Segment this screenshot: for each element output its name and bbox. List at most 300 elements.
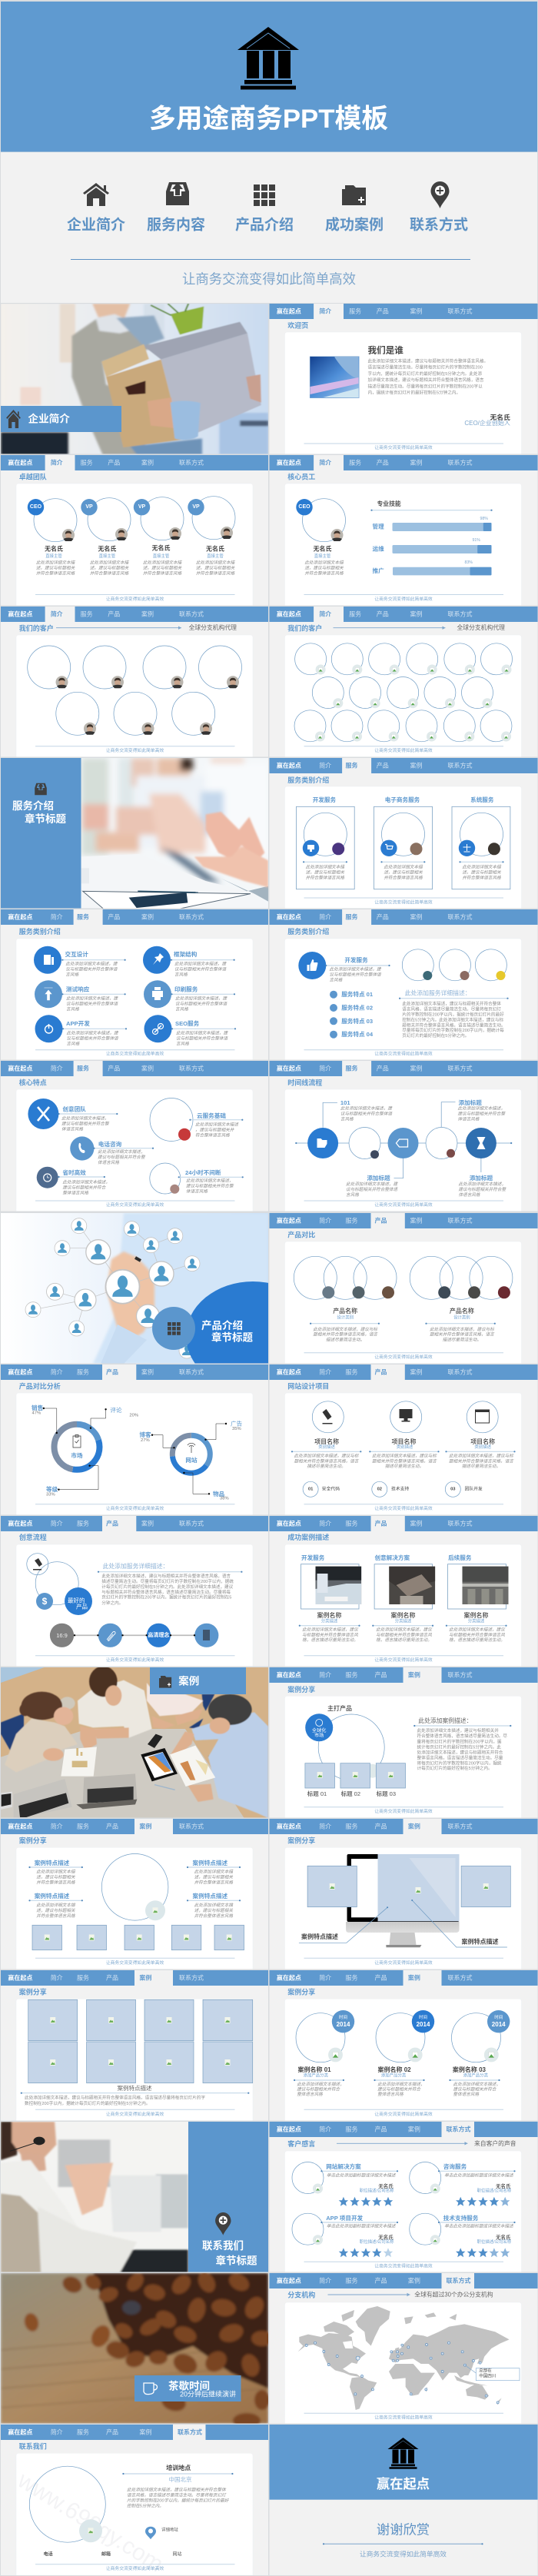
nav bar [269,1364,538,1380]
feature: efficiency [37,1167,110,1195]
page title: 案例分享 [287,1987,315,1996]
team member: CEO: 直接主管 [45,553,62,559]
gallery caption: 此处添加详细文本描述，建议与标题相关并符合整体语言风格，语言描述尽量将每页幻灯片的字 [25,2094,205,2100]
team member: VP 2: VP [138,504,145,510]
page title: 案例分享 [19,1987,47,1996]
photo: living room [389,1567,435,1604]
nav bar: 简介 [51,2428,63,2435]
step: lower title 1: 议与标题相关并符合整体语 [346,1187,399,1192]
feature: 24 hours: 此处添加详细文本描述， [186,1178,234,1184]
case 3: 案例名称 [464,1611,489,1619]
nav bar [1,1516,269,1531]
body text: 字以内，据统计每页幻灯片的最好控制在5分钟之内。此处添 [367,371,482,377]
case 03: 2014 [492,2020,506,2028]
nav bar: 服务 [77,1064,89,1072]
footer: 让商务交流变得如此简单高效 [374,2262,433,2269]
feature: efficiency: 此处添加详细文本描述， [62,1179,110,1185]
process steps [50,1624,218,1647]
feature left top: 述，建议与标题相关 [36,1875,75,1880]
thank you text: 谢谢欣赏 [377,2522,430,2538]
nav bar: 简介 [319,2277,331,2285]
service: testing: 此处添加详细文本描述，建 [66,996,119,1002]
numbered feature list: 技术支持 [391,1485,409,1491]
signature: 无名氏 [490,413,510,421]
team member: CEO: CEO [30,504,42,510]
network connectors [33,1226,192,1328]
nav bar: 案例 [139,1974,151,1982]
feature right top [188,1859,240,1886]
icon: home [6,410,21,428]
nav bar: 产品 [108,610,120,618]
nav bar: 联系方式 [447,1519,472,1527]
feature: 24 hours: 24小时不间断 [185,1168,221,1176]
page title: 产品对比分析 [19,1381,61,1390]
case 02: 时间 [419,2014,427,2020]
nav bar: 服务 [346,1519,358,1527]
nav bar [269,1213,538,1228]
nav bar: 产品 [377,913,389,921]
section panel [188,2122,268,2272]
nav bar: 案例 [410,1064,423,1072]
nav bar: 联系方式 [447,761,472,769]
section labels: 联系方式 [410,215,468,234]
page title: 客户感言 [287,2139,315,2148]
team member: CEO: 无名氏 [314,544,332,552]
photo: shelves [463,1567,509,1604]
product group 2: 此处添加详细文本描述，建议与标 [430,1327,495,1332]
step: lower title 2: 体语言风格 [458,1192,480,1198]
company name: 赢在起点 [377,2476,430,2491]
content card [284,635,521,766]
page title: 案例分享 [19,1836,47,1844]
slide: case section cover [1,1667,268,1817]
detail description: 尽量将每页幻灯片的字数控制在200字以内，据统计每 [402,1027,504,1033]
central image ring [101,1854,168,1920]
testimonial: consulting [410,2162,515,2206]
team member: CEO: 述，建议与标题相关 [36,565,75,570]
footer: 让商务交流变得如此简单高效 [374,1505,433,1511]
world map [298,2306,510,2410]
nav bar: 服务 [77,913,89,921]
nav bar [269,607,538,622]
photo: team around table [1,1666,268,1818]
nav bar: 案例 [408,1974,420,1982]
footer: 让商务交流变得如此简单高效 [106,1959,164,1966]
donut chart: website: 物品 [213,1490,225,1497]
photo: woman carrying box [1,304,268,455]
service: framework: 框架结构 [174,950,198,958]
tea break banner [134,2375,241,2401]
training location: 中国北京 [169,2475,192,2483]
project 3: 此处添加详细文本描述，建议与标 [449,1454,514,1459]
photo: network diagram with hand [1,1213,268,1364]
service card: development: 述，建议与标题相关 [306,869,344,875]
body text: 加详细文本描述，建议与标题相关并符合整体语言风格，语言 [367,377,484,383]
slide: monitor showcase [269,1819,538,1969]
feature: 24 hours [150,1163,243,1195]
nav bar: 产品 [375,1519,387,1527]
service: printing: 印刷服务 [174,986,198,993]
service feature list: 服务特点 02 [341,1004,373,1012]
case 02: 建议与标题相关并符合 [377,2086,421,2092]
nav bar: 服务 [77,1822,89,1830]
step: lower title 1: 言风格 [346,1192,359,1198]
nav bar: 简介 [319,1519,331,1527]
team member: VP 1: 并符合整体语言风格 [90,570,129,576]
team member: CEO: 无名氏 [45,544,63,552]
service: printing [144,980,234,1012]
nav bar: 案例 [139,2428,151,2435]
service: testing [35,980,125,1012]
project 1: 描述尽量简洁生动。 [307,1464,346,1469]
nav bar: 服务 [349,458,361,466]
nav bar: 产品 [375,1822,387,1830]
image grid [28,1999,253,2083]
page title: 服务类别介绍 [287,776,329,784]
nav bar: 案例 [141,1519,154,1527]
section banner [150,1667,246,1694]
numbered feature list: 03 [450,1487,456,1491]
nav bar: 联系方式 [447,1216,472,1224]
image rings [402,949,506,981]
nav bar: 产品 [106,1974,118,1982]
content card [16,1999,253,2129]
feature: phone consulting: 电话咨询 [98,1140,122,1148]
nav bar: 服务 [349,307,361,315]
slide: company intro cover [1,304,268,454]
skill bar: operations: 运维 [372,544,384,552]
product group 1: 设计类别 [337,1314,354,1320]
photo: clapping hands [1,758,268,909]
feature right bottom: 述，建议与标题相关 [194,1908,233,1913]
numbered feature list: 02 [377,1487,382,1491]
product group 1: 此处添加详细文本描述，建议与标 [313,1327,379,1332]
donut chart: market: 市场 [71,1451,83,1459]
testimonial: app project: 无名氏 [378,2234,394,2240]
detail description: 此处添加服务详细描述： [103,1562,168,1570]
detail description: 与标题相关并符合整体语言风格，语言描述尽量简洁生动。尽量将每 [101,1589,231,1595]
team member: VP 3: 述，建议与标题相关 [196,565,235,570]
step: upper title: 建议与标题相关并符合整 [458,1112,506,1117]
project 1: 类别描述 [318,1444,335,1450]
slide: thank you [269,2425,538,2575]
feature: creative team [28,1099,117,1132]
case description: 将每页幻灯片的字数控制在200字以内，据统 [417,1760,502,1766]
team member: VP 3: 直接主管 [207,553,224,559]
skills heading: 专业技能 [377,500,401,507]
donut chart: website: 博客 [139,1431,151,1438]
case 1: 与标题相关并符合整体语言风 [302,1632,358,1637]
nav bar: 赢在起点 [8,1519,32,1527]
detail description: 计每页幻灯片的最好控制在5分钟之内。此处添加详细文本描述，建议 [101,1584,234,1590]
nav bar: 简介 [51,610,63,618]
case 03: 整体语言风格 [453,2092,479,2097]
nav bar [1,909,269,925]
team member: VP 1: VP [85,504,93,510]
contact channels: 网站 [172,2551,182,2558]
skill bar: operations: 91% [472,538,480,543]
nav bar: 联系方式 [447,1368,472,1376]
callout right [411,1900,507,1947]
feature right top: 并符合整体语言风格 [194,1880,233,1886]
icon: bank building [387,2438,418,2469]
image placeholders [32,1925,244,1950]
nav bar: 服务 [346,1064,358,1072]
step: 101: 此处添加详细文本描述，建 [340,1106,393,1112]
nav bar: 简介 [319,1368,331,1376]
nav bar: 简介 [319,761,331,769]
testimonial: consulting: 咨询服务 [443,2162,467,2170]
page title: 分支机构 [287,2290,315,2298]
body text: 语言描述尽量简洁生动。尽量将每页幻灯片的字数控制在200 [367,364,483,371]
case 02: 2014 [417,2020,430,2028]
nav bar: 案例 [408,2125,420,2132]
service: SEO: SEO服务 [175,1019,200,1027]
nav bar [1,1819,269,1834]
footer: 让商务交流变得如此简单高效 [374,1051,433,1057]
detail description: 此处添加详细文本描述，建议与标题相关并符合整体 [402,1001,501,1007]
slide: service categories cards [269,758,538,909]
case 03: 添加产品分类 [463,2072,489,2078]
step: lower title 2 [458,1158,506,1198]
donut chart: market: 47% [32,1411,41,1416]
feature: phone consulting [70,1136,153,1165]
case 01: 建议与标题相关并符合 [297,2086,341,2092]
case 2: 此处添加详细文本描述，建议 [376,1627,433,1633]
nav bar: 联系方式 [447,1822,472,1830]
page title: 我们的客户 [287,623,322,632]
body text: 描述尽量简洁生动。尽量将每页幻灯片的字数控制在200字以 [367,383,483,389]
slide: tea break [1,2273,268,2423]
nav bar: 服务 [77,1519,89,1527]
case 03: 此处添加详细文本描述， [453,2082,500,2087]
nav bar: 案例 [139,1822,151,1830]
nav bar: 案例 [141,1368,154,1376]
feature left bottom: 述，建议与标题相关 [36,1908,75,1913]
flagship product diagram [305,1704,406,1797]
nav bar: 赢在起点 [8,1064,32,1072]
section badge [152,1281,320,1391]
thumbs up feature: 言风格 [329,978,343,983]
service card: systems: 此处添加详细文本描 [462,864,502,869]
case 01: 此处添加详细文本描述， [297,2082,344,2087]
page title: 产品对比 [287,1231,315,1239]
nav bar [269,1819,538,1834]
banner text: 20分钟后继续演讲 [180,2389,236,2398]
feature: phone consulting: 此处添加详细文本描述， [98,1149,145,1155]
donut chart: website: 广告 [231,1419,243,1427]
feature left top [29,1859,82,1886]
service: app development: 言风格 [66,1041,80,1046]
content card [16,635,253,766]
feature right bottom [188,1892,240,1919]
footer: 让商务交流变得如此简单高效 [106,1202,164,1208]
case 02: 此处添加详细文本描述， [377,2082,425,2087]
nav bar: 赢在起点 [277,610,301,618]
case 02: 案例名称 02 [378,2066,411,2073]
service card: systems [452,796,510,889]
step: lower title 1 [346,1158,403,1198]
step: lower title 1: 此处添加详细文本描述，建 [346,1182,399,1187]
team member: VP 2: 述，建议与标题相关 [143,565,182,570]
step: 101: 议与标题相关并符合整体语 [340,1112,393,1117]
donut chart: website: 27% [141,1438,150,1443]
tagline: 让商务交流变得如此简单高效 [182,271,356,287]
nav bar: 案例 [410,307,423,315]
nav bar: 案例 [410,1519,423,1527]
nav bar [269,1516,538,1531]
feature left bottom [29,1892,82,1919]
slide: contact section cover [1,2122,268,2272]
slide: flagship case [269,1667,538,1817]
nav bar: 服务 [346,1368,358,1376]
project 1 [292,1401,360,1469]
section title: 产品介绍 [201,1319,243,1331]
content card [284,1999,521,2129]
training location: 片的字数控制在200字以内，据统计每页幻灯片的最好 [127,2498,230,2504]
content card [284,332,521,463]
product group 1 [294,1256,397,1342]
service: SEO: 言风格 [176,1041,189,1046]
slide: product section cover [1,1213,268,1364]
training location: 此处添加详细文本描述，建议与标题相关并符合整体 [127,2488,227,2493]
body text: 此处添加详细文本描述，建议与标题相关并符合整体语言风格， [367,358,488,364]
case description: 此处添加详细文本描述，建议与标题相关并 [417,1727,499,1733]
content card [16,1393,253,1524]
slide: image gallery [1,1970,268,2120]
nav bar [1,455,269,470]
testimonial: app project: 单击此处添加副标题或详细文本描述 [327,2224,397,2229]
nav bar: 产品 [106,1368,118,1376]
testimonial: tech support: 技术支持服务 [443,2214,479,2222]
skill bar: management: 管理 [372,523,384,530]
nav bar: 案例 [410,761,423,769]
nav bar: 产品 [377,307,389,315]
timeline axis and nodes [296,1127,511,1159]
case 2: 创意解决方案 [375,1554,410,1561]
feature right top: 此处添加详细文本描 [194,1870,234,1875]
nav bar: 简介 [51,1368,63,1376]
testimonial: consulting: 职位描述/公司名称 [477,2187,512,2193]
service: app development: APP开发 [66,1019,90,1027]
nav bar: 产品 [375,2277,387,2285]
banner text: 案例 [178,1674,199,1687]
slide: product analysis [1,1364,268,1514]
nav bar: 服务 [77,1974,89,1982]
donut chart: market: 销售 [32,1404,43,1411]
service card: development: 此处添加详细文本描 [306,864,345,869]
banner text: 企业简介 [28,412,70,424]
service: testing: 言风格 [66,1006,79,1012]
arrow [327,2294,410,2295]
subtitle: 全球分支机构代理 [457,623,505,631]
nav bar: 简介 [51,458,63,466]
skill bar: promotion [372,560,492,575]
case 3: 分类描述 [468,1617,485,1624]
client portraits [28,646,241,735]
slide: service detail [269,909,538,1059]
team member: CEO: 直接主管 [314,553,331,559]
nav bar: 联系方式 [446,2125,470,2132]
feature right bottom: 此处添加详细文本描 [194,1903,234,1908]
nav bar [1,2425,269,2440]
nav bar: 赢在起点 [277,1519,301,1527]
project 3: 题相关并符合整体语言风格，语言 [449,1458,514,1464]
team member: VP 2: 无名氏 [152,544,171,552]
nav bar: 联系方式 [178,2428,202,2435]
nav bar: 服务 [346,2125,358,2132]
service: testing: 测试响应 [66,986,90,993]
service: SEO [144,1015,235,1046]
nav bar: 联系方式 [447,1064,472,1072]
footer: 让商务交流变得如此简单高效 [374,444,433,450]
table of contents panel [1,152,537,303]
section labels: 产品介绍 [235,217,294,234]
product group 2: 描述尽量简洁生动。 [443,1337,481,1342]
project 2: 描述尽量简洁生动。 [385,1464,423,1469]
service card: systems: 述，建议与标题相关 [462,869,501,875]
page title: 网站设计项目 [287,1381,329,1390]
feature: phone consulting: 体语言风格 [98,1160,119,1165]
case 3: 格，语言描述尽量简洁生动。 [449,1637,505,1643]
nav bar: 联系方式 [179,458,204,466]
footer: 让商务交流变得如此简单高效 [374,1202,433,1208]
case description: 统计每页幻灯片的最好控制在5分钟之内。此 [417,1743,501,1750]
nav bar: 赢在起点 [277,2125,301,2132]
product group 1: 题相关并符合整体语言风格，语言 [313,1332,379,1338]
skill bar: promotion: 推广 [372,567,384,574]
content card [16,939,253,1069]
nav bar: 产品 [375,1368,387,1376]
signature: CEO/企业创始人 [464,419,510,427]
slide: timeline [269,1061,538,1212]
content card [284,1393,521,1524]
product group 2: 题相关并符合整体语言风格，语言 [430,1332,495,1338]
content card [284,1696,521,1826]
project 1: 题相关并符合整体语言风格，语言 [294,1458,360,1464]
nav bar: 简介 [51,1064,63,1072]
nav bar: 产品 [377,610,389,618]
flagship product diagram: 主打产品 [327,1704,352,1712]
main title: 多用途商务PPT模板 [149,105,388,134]
footer: 让商务交流变得如此简单高效 [106,1657,164,1663]
nav bar: 简介 [319,913,331,921]
nav bar: 联系方式 [447,1974,472,1982]
section labels: 成功案例 [325,215,384,234]
project 1: 此处添加详细文本描述，建议与标 [294,1454,360,1459]
footer: 让商务交流变得如此简单高效 [106,747,164,753]
numbered feature list: 安全代码 [322,1485,340,1491]
thumbs up feature: 议与标题相关并符合整体语 [329,972,382,978]
content card [284,939,521,1069]
feature: 24 hours: 建议与标题相关并符合整 [186,1184,234,1189]
divider with dots [324,2543,483,2544]
nav bar: 案例 [141,458,154,466]
team member: VP 1 [81,498,131,576]
service: SEO: 此处添加详细文本描述，建 [176,1030,229,1035]
feature: efficiency: 整体语言风格 [62,1190,88,1195]
case description: 符合整体语言风格，语言描述尽量简洁生动。尽 [417,1733,507,1739]
gallery caption [22,2084,248,2106]
product group 1: 产品名称 [333,1307,357,1315]
flagship product diagram: 全球化 [312,1727,326,1733]
thumbs up feature [298,952,389,983]
step: upper title: 此处添加详细文本描述， [458,1106,505,1112]
logo circles [294,643,512,742]
service card: e-commerce [374,796,432,889]
case description: 此处添加案例描述： [418,1717,472,1724]
footer: 让商务交流变得如此简单高效 [106,2565,164,2571]
